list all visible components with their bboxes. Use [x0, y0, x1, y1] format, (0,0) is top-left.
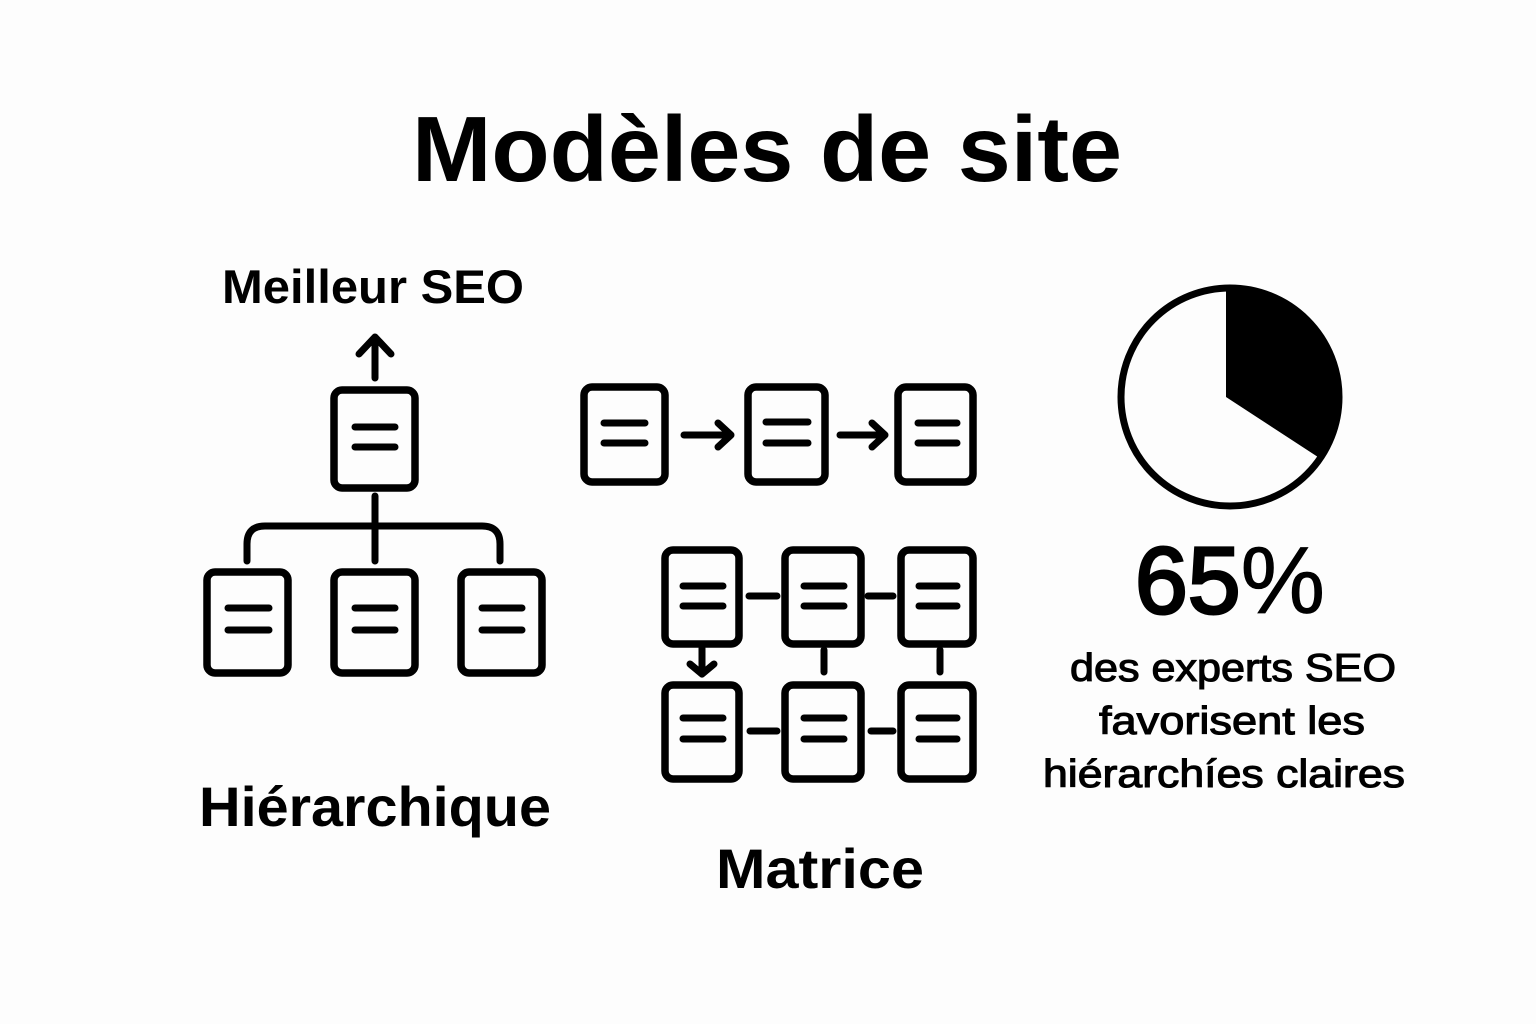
tree connectors	[247, 496, 500, 561]
icon: matrix row 1 col 1	[665, 550, 739, 644]
stat description	[1043, 647, 1405, 796]
label: best SEO: Meilleur SEO	[222, 260, 524, 313]
panel: hierarchical model	[199, 260, 551, 838]
panel: matrix model	[665, 550, 973, 900]
arrow: page 2 to 3	[840, 423, 885, 447]
stat description: favorisent les	[1099, 700, 1365, 743]
stat description: hiérarchíes claires	[1043, 753, 1405, 796]
arrow: page 1 to 2	[684, 423, 731, 447]
icon: matrix row 1 col 3	[901, 550, 973, 644]
icon: page 2	[748, 387, 825, 482]
pie chart	[1121, 288, 1340, 506]
arrow: up	[359, 337, 391, 378]
icon: page 1	[584, 387, 665, 482]
icon: matrix row 1 col 2	[785, 550, 861, 644]
icon: matrix row 2 col 3	[901, 685, 973, 779]
matrix connectors	[749, 596, 940, 672]
icon: child page left	[207, 572, 288, 673]
label: matrix: Matrice	[716, 837, 924, 900]
icon: child page center	[334, 572, 415, 673]
icon: top page	[334, 390, 415, 488]
icon: matrix row 2 col 1	[665, 685, 739, 779]
matrix connectors row 2	[750, 728, 893, 734]
panel: sequential model	[584, 387, 973, 482]
title: Modèles de site	[412, 97, 1122, 201]
stat description: des experts SEO	[1070, 647, 1396, 690]
icon: matrix row 2 col 2	[785, 685, 861, 779]
arrow: down	[690, 648, 714, 674]
icon: child page right	[461, 572, 542, 673]
icon: page 3	[898, 387, 973, 482]
panel: statistic	[1043, 288, 1405, 796]
stat: 65%: 65%	[1135, 528, 1325, 634]
label: hierarchical: Hiérarchique	[199, 775, 551, 838]
